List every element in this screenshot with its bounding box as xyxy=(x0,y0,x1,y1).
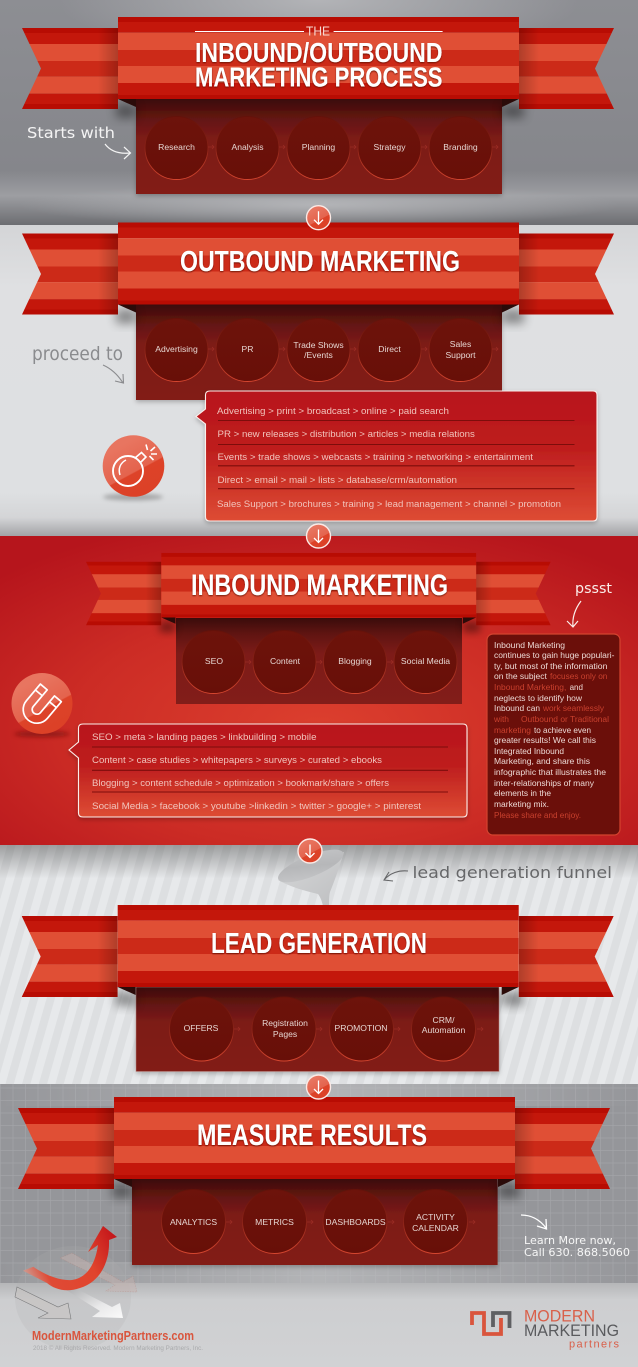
step: Sales Support xyxy=(429,318,492,382)
path: Content: Content > case studies > whitepapers > surveys > curated > ebooks xyxy=(92,755,383,765)
text box: about inbound marketing: elements in the xyxy=(494,788,551,798)
arrows between steps xyxy=(208,145,498,149)
annotation: learn more: Learn More now, xyxy=(524,1234,616,1247)
text box: about inbound marketing: to achieve even xyxy=(534,725,591,735)
icon: funnel xyxy=(274,843,347,906)
heading: INBOUND MARKETING xyxy=(191,569,448,602)
text box: about inbound marketing: Integrated Inbound xyxy=(494,746,564,756)
logo: Modern Marketing Partners xyxy=(472,1308,620,1351)
path: Blogging: Blogging > content schedule > optimization > bookmark/share > offers xyxy=(92,778,390,788)
panel: measurement steps xyxy=(132,1179,498,1265)
step: SEO xyxy=(182,630,245,694)
annotation: proceed to xyxy=(32,343,124,383)
footer: website and copyright: 2018 © All Rights Reserved. Modern Marketing Partners, Inc. xyxy=(33,1344,203,1352)
ribbon: lead generation xyxy=(0,905,638,1006)
step: Sales Support: Sales xyxy=(450,339,471,349)
arrow badge 4 xyxy=(306,1075,330,1099)
arrow badge 3 xyxy=(298,839,322,863)
annotation: Starts with: Starts with xyxy=(27,124,115,142)
text box: about inbound marketing: Marketing, and share this xyxy=(494,756,590,766)
section background: inbound red xyxy=(0,536,638,845)
text box: about inbound marketing: Outbound or Traditional xyxy=(521,714,609,724)
step: Trade Shows /Events: Trade Shows xyxy=(293,340,344,350)
step: CRM/ Automation xyxy=(412,997,476,1061)
text box: about inbound marketing: Inbound Marketing, xyxy=(494,682,566,692)
step: Advertising xyxy=(145,318,208,382)
text box: about inbound marketing: continues to gain huge populari- xyxy=(494,650,615,660)
section background: outbound light gray xyxy=(0,225,638,536)
step: Advertising: Advertising xyxy=(155,344,198,354)
step: PROMOTION: PROMOTION xyxy=(334,1023,388,1033)
step: Research: Research xyxy=(158,142,195,152)
logo: Modern Marketing Partners: MODERN xyxy=(524,1308,595,1326)
step: Trade Shows /Events: /Events xyxy=(304,350,333,360)
step: Analysis xyxy=(216,116,279,180)
section background: measure results grid xyxy=(0,1084,638,1283)
section background: footer xyxy=(0,1283,638,1367)
step: METRICS xyxy=(242,1190,306,1254)
step: Direct xyxy=(358,318,421,382)
step: ANALYTICS xyxy=(162,1190,226,1254)
arrow badge 2 xyxy=(306,524,330,548)
logo: Modern Marketing Partners: partners xyxy=(569,1339,620,1351)
step: PR xyxy=(216,318,279,382)
text box: about inbound marketing: on the subject xyxy=(494,671,547,681)
text box: about inbound marketing: infographic that illustrates the xyxy=(494,767,606,777)
step: ACTIVITY CALENDAR xyxy=(404,1190,468,1254)
step: Research xyxy=(145,116,208,180)
step: Planning xyxy=(287,116,350,180)
arrows between steps xyxy=(245,660,393,664)
annotation: proceed to: proceed to xyxy=(32,343,123,365)
heading: OUTBOUND MARKETING xyxy=(180,246,460,278)
text box: about inbound marketing: focuses only on xyxy=(550,671,608,681)
section background: lead generation diagonal stripes xyxy=(0,845,638,1084)
callout: outbound paths xyxy=(196,391,597,521)
path: SEO: SEO > meta > landing pages > linkbuilding > mobile xyxy=(92,732,316,742)
arrows between steps xyxy=(208,347,498,351)
step: ACTIVITY CALENDAR: CALENDAR xyxy=(412,1223,459,1233)
step: Branding: Branding xyxy=(443,142,478,152)
panel: inbound channels xyxy=(176,618,462,704)
panel: lead generation steps xyxy=(136,987,499,1072)
panel: intro process steps xyxy=(136,99,502,194)
step: Trade Shows /Events xyxy=(287,318,350,382)
step: PR: PR xyxy=(242,344,253,354)
annotation: lead generation funnel: lead generation funnel xyxy=(412,863,612,882)
text box: about inbound marketing xyxy=(487,634,620,835)
step: METRICS: METRICS xyxy=(255,1217,294,1227)
icon: bomb xyxy=(103,435,164,500)
step: CRM/ Automation: Automation xyxy=(422,1025,465,1035)
step: Social Media xyxy=(394,630,457,694)
text box: about inbound marketing: work seamlessly xyxy=(542,703,605,713)
text box: about inbound marketing: neglects to identify how xyxy=(494,693,583,703)
footer: website and copyright: ModernMarketingPartners.com xyxy=(32,1329,194,1343)
title line 1: INBOUND/OUTBOUND xyxy=(195,37,442,68)
step: Social Media: Social Media xyxy=(401,656,450,666)
text box: about inbound marketing: greater results! We call this xyxy=(494,735,596,745)
step: PROMOTION xyxy=(330,997,394,1061)
step: SEO: SEO xyxy=(205,656,223,666)
panel: outbound channels xyxy=(136,304,502,400)
step: Strategy xyxy=(358,116,421,180)
ribbon: main title xyxy=(0,17,638,118)
annotation: pssst xyxy=(567,581,613,627)
logo: Modern Marketing Partners: MARKETING xyxy=(524,1322,619,1340)
callout: inbound paths xyxy=(69,724,467,817)
arrows between steps xyxy=(226,1220,475,1224)
step: Branding xyxy=(429,116,492,180)
step: Strategy: Strategy xyxy=(373,142,406,152)
step: Registration Pages: Pages xyxy=(273,1029,297,1039)
heading: LEAD GENERATION xyxy=(211,928,427,960)
step: Blogging: Blogging xyxy=(338,656,372,666)
annotation: learn more: Call 630. 868.5060 xyxy=(524,1246,630,1259)
path: PR: PR > new releases > distribution > articles > media relations xyxy=(218,429,475,439)
footer: website and copyright xyxy=(32,1329,203,1352)
step: CRM/ Automation: CRM/ xyxy=(433,1015,455,1025)
annotation: Starts with xyxy=(27,124,130,159)
path: Direct: Direct > email > mail > lists > database/crm/automation xyxy=(218,475,457,485)
text box: about inbound marketing: Inbound can xyxy=(494,703,540,713)
step: OFFERS xyxy=(170,997,234,1061)
arrows between steps xyxy=(234,1027,483,1031)
title kicker: THE xyxy=(306,24,330,38)
text box: about inbound marketing: ty, but most of the information xyxy=(494,661,608,671)
ribbon: outbound marketing xyxy=(0,222,638,324)
step: Content: Content xyxy=(270,656,301,666)
annotation: pssst: pssst xyxy=(575,581,613,597)
icon: magnet xyxy=(12,673,72,737)
step: Blogging xyxy=(324,630,386,694)
step: ACTIVITY CALENDAR: ACTIVITY xyxy=(416,1212,455,1222)
text box: about inbound marketing: Inbound Marketing xyxy=(494,640,565,650)
step: Content xyxy=(253,630,316,694)
path: Sales Support: Sales Support > brochures > training > lead management > channel > promotion xyxy=(217,499,561,509)
path: Social Media: Social Media > facebook > youtube >linkedin > twitter > google+ > pinterest xyxy=(92,801,422,811)
ribbon: inbound marketing xyxy=(69,553,570,632)
text box: about inbound marketing: with xyxy=(493,714,509,724)
step: Planning: Planning xyxy=(302,142,335,152)
text box: about inbound marketing: Please share and enjoy. xyxy=(494,810,581,820)
step: DASHBOARDS: DASHBOARDS xyxy=(325,1217,386,1227)
text box: about inbound marketing: marketing mix. xyxy=(494,799,549,809)
step: Registration Pages xyxy=(252,997,316,1061)
path: Advertising: Advertising > print > broadcast > online > paid search xyxy=(217,406,449,416)
step: Sales Support: Support xyxy=(445,350,476,360)
title line 2: MARKETING PROCESS xyxy=(195,62,442,93)
section background: intro gray xyxy=(0,0,638,227)
step: Registration Pages: Registration xyxy=(262,1018,308,1028)
step: Analysis: Analysis xyxy=(232,142,264,152)
path: Events: Events > trade shows > webcasts > training > networking > entertainment xyxy=(218,452,534,462)
text box: about inbound marketing: marketing xyxy=(494,725,531,735)
annotation: learn more xyxy=(521,1215,630,1259)
step: ANALYTICS: ANALYTICS xyxy=(170,1217,217,1227)
text box: about inbound marketing: inter-relationships of many xyxy=(494,778,595,788)
arrow badge 1 xyxy=(306,206,330,230)
text box: about inbound marketing: and xyxy=(570,682,583,692)
title kicker lines xyxy=(195,30,443,32)
heading: MEASURE RESULTS xyxy=(197,1119,427,1152)
illustration: arrows changing direction xyxy=(15,1226,137,1350)
ribbon: measure results xyxy=(0,1097,634,1198)
step: DASHBOARDS xyxy=(323,1190,387,1254)
step: OFFERS: OFFERS xyxy=(184,1023,219,1033)
step: Direct: Direct xyxy=(378,344,401,354)
